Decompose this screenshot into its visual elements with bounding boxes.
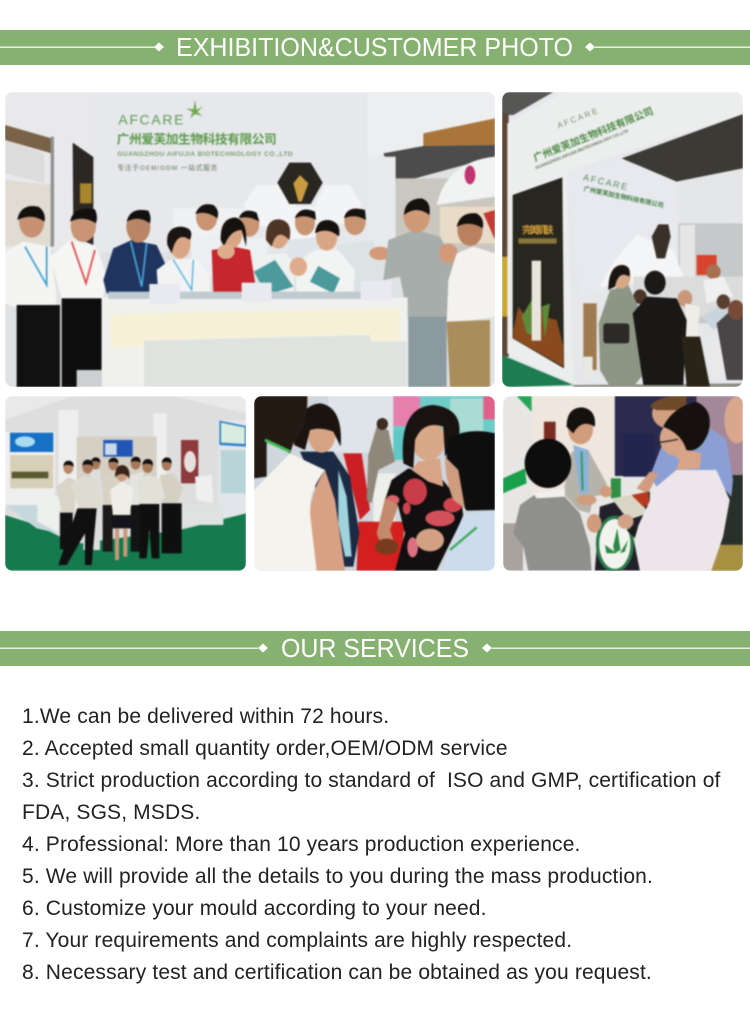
woman in floral dress	[375, 405, 463, 571]
services list: 5. We will provide all the details to you during the mass production.	[22, 865, 653, 888]
man in blue shirt at back	[636, 396, 733, 497]
services list: FDA, SGS, MSDS.	[22, 801, 200, 824]
black product poster	[513, 177, 564, 368]
booth logo and company name: 广州爱芙加生物科技有限公司	[117, 131, 277, 146]
display table with hemp logo	[595, 478, 650, 571]
booth logo and company name: 专注于OEM/ODM 一站式服务	[117, 163, 218, 172]
services list: 6. Customize your mould according to your need.	[22, 897, 487, 920]
booth logo and company name: AFCARE	[118, 112, 185, 128]
woman in white blouse with glasses	[618, 402, 730, 571]
services list: 7. Your requirements and complaints are highly respected.	[22, 929, 572, 952]
photo: visitors at product counter	[503, 396, 743, 571]
black product poster: 完美肌肤	[522, 223, 554, 236]
banner: our services	[0, 631, 750, 666]
booth logo and company name	[117, 100, 293, 172]
banner: exhibition and customer photo: EXHIBITION&CUSTOMER PHOTO	[176, 32, 573, 62]
white reception counter	[102, 281, 408, 387]
company name on fascia: GUANGZHOU AIFUJIA BIOTECHNOLOGY CO.,LTD	[535, 128, 629, 170]
photo: team at exhibition booth	[5, 92, 495, 387]
company name on fascia: AFCARE	[556, 106, 601, 130]
photo: team on green carpet	[5, 396, 246, 571]
woman with bob haircut in grey	[513, 439, 602, 571]
services list	[22, 705, 721, 984]
woman in navy scarf	[294, 403, 359, 567]
black hex emblem	[652, 224, 671, 258]
front row of staff	[5, 198, 495, 388]
services list: 4. Professional: More than 10 years production experience.	[22, 833, 581, 856]
man in grey blazer	[563, 407, 612, 513]
rear group of staff	[190, 204, 380, 290]
standing team of eight	[57, 457, 183, 565]
services list: 8. Necessary test and certification can be obtained as you request.	[22, 961, 652, 984]
woman with white sleeveless top	[254, 396, 345, 571]
company name on fascia: AFCARE	[582, 172, 630, 192]
person in striped shirt from behind	[416, 431, 495, 571]
photo: women reviewing a product	[254, 396, 495, 571]
company name on fascia	[531, 104, 665, 210]
visitors at booth	[599, 264, 744, 387]
services list: 3. Strict production according to standard of ISO and GMP, certification of	[22, 769, 721, 792]
company name on fascia: 广州爱芙加生物科技有限公司	[531, 104, 655, 164]
banner: exhibition and customer photo	[0, 30, 750, 65]
services list: 1.We can be delivered within 72 hours.	[22, 705, 389, 728]
booth logo and company name: GUANGZHOU AIFUJIA BIOTECHNOLOGY CO.,LTD	[117, 151, 293, 158]
banner: our services: OUR SERVICES	[281, 633, 469, 663]
photo: booth exterior with visitors	[502, 92, 743, 387]
services list: 2. Accepted small quantity order,OEM/ODM service	[22, 737, 508, 760]
icon: dark hexagon emblem	[277, 163, 323, 204]
company name on fascia: 广州爱芙加生物科技有限公司	[583, 184, 665, 210]
